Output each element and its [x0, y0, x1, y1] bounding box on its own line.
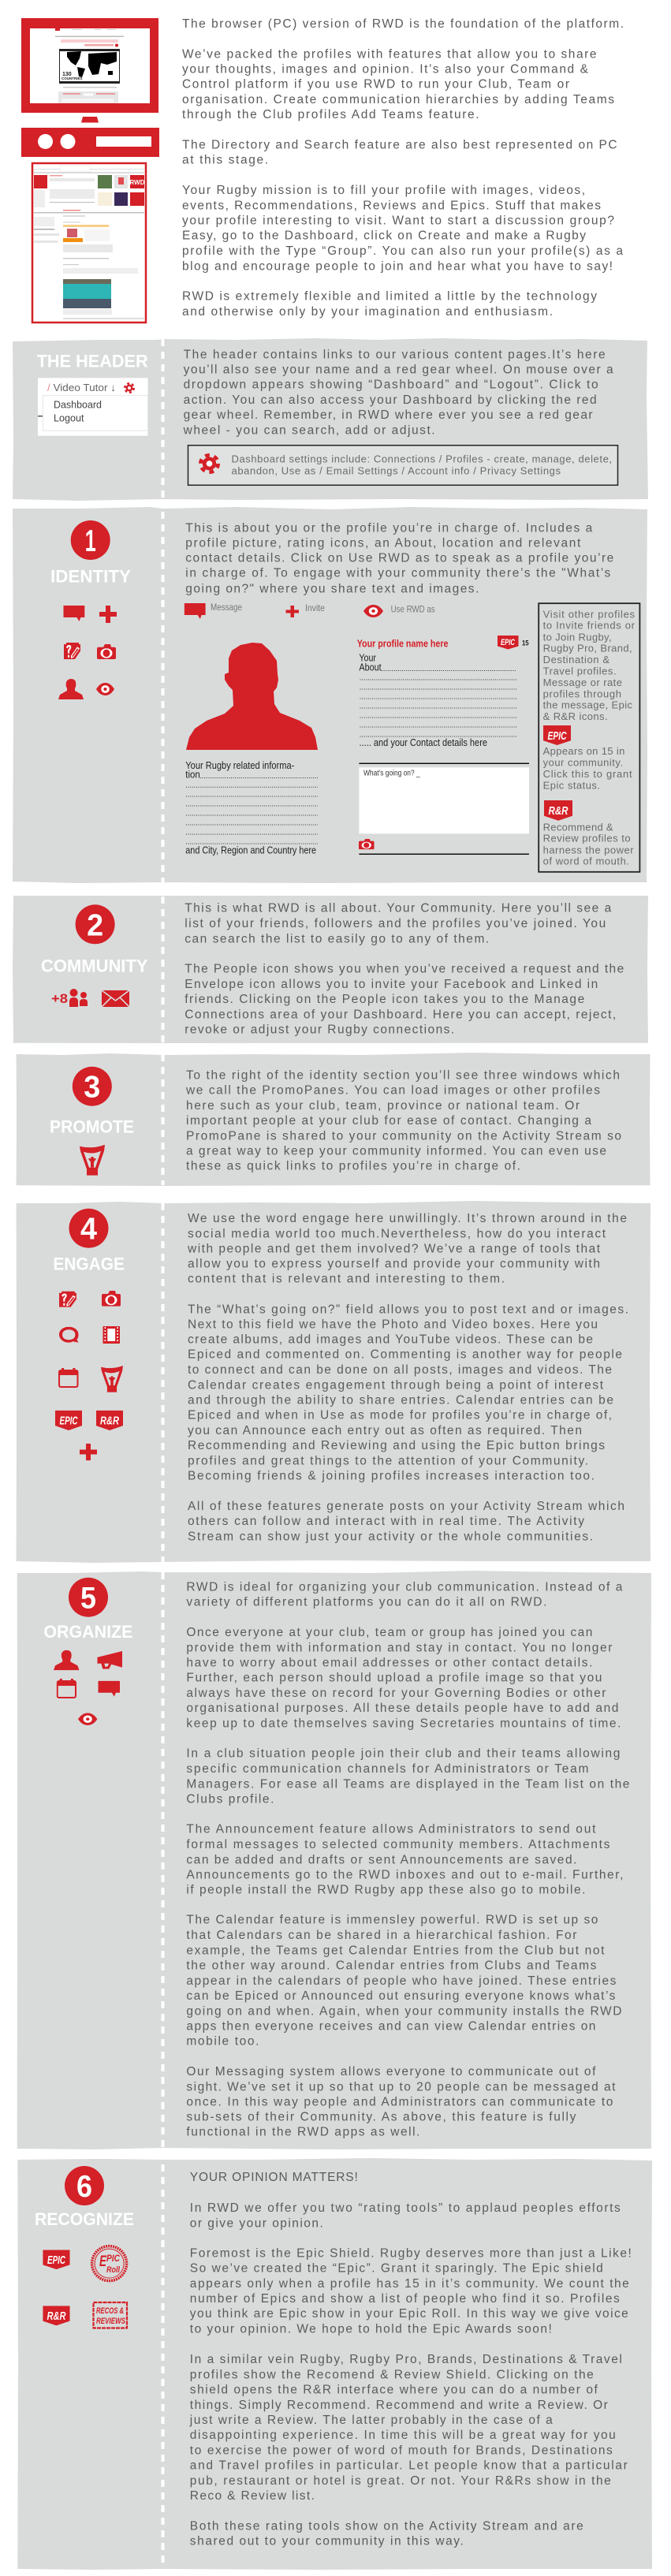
header description text	[183, 348, 613, 437]
organize description text: Announcements go to the RWD inboxes and out to e-mail. Further,	[186, 1868, 623, 1881]
recognize description text: things. Simply Recommend. Recommend and write a Review. Or	[190, 2399, 608, 2412]
profile name and about: Your profile name here	[357, 637, 448, 649]
organize description text: specific communication channels for Administrators or Team	[186, 1762, 588, 1776]
intro text block: profile with the Type “Group”. You can also run your profile(s) as a	[182, 244, 623, 258]
rugby information form lines	[185, 759, 318, 856]
intro text block: at this stage.	[182, 153, 268, 167]
monitor screen: RWD homepage screenshot: COUNTRIES	[62, 76, 83, 80]
community description text: The People icon shows you when you’ve received a request and the	[185, 963, 624, 976]
header description text: gear wheel. Remember, in RWD where ever you see a red gear	[184, 408, 593, 422]
identity description text: profile picture, rating icons, an About, location and relevant	[185, 536, 581, 550]
legend: message, invite, use RWD as: Invite	[305, 602, 325, 613]
promote description text	[185, 1068, 621, 1173]
intro text block: your thoughts, images and opinion. It’s also your Command &	[182, 63, 589, 76]
dropdown screenshot	[38, 378, 148, 436]
engage description text: social media world too much.Nevertheless, how do you interact	[188, 1227, 606, 1240]
dropdown screenshot: Dashboard	[54, 399, 102, 411]
identity icons	[58, 606, 117, 699]
organize description text: In a club situation people join their club and their teams allowing	[186, 1747, 620, 1761]
engage description text: create albums, add images and YouTube videos. These can be	[188, 1333, 593, 1347]
callout: visit other profiles: profiles through	[543, 688, 621, 699]
callout: visit other profiles: to Invite friends or	[543, 620, 636, 632]
callout: visit other profiles: R&R	[549, 804, 568, 818]
callout: visit other profiles: EPIC	[547, 729, 567, 743]
callout: visit other profiles: Rugby Pro, Brand,	[543, 643, 632, 654]
rugby information form lines: tion	[185, 769, 200, 781]
identity description text: going on?" where you share text and images.	[185, 582, 479, 595]
community description text: This is what RWD is all about. Your Community. Here you’ll see a	[185, 902, 612, 915]
intro text block: your profile interesting to visit. Want to start a discussion group?	[182, 214, 614, 228]
organize description text: have to worry about email addresses or other contact details.	[186, 1656, 592, 1669]
panel: the header	[13, 338, 648, 501]
recognize description text: or give your opinion.	[190, 2216, 323, 2230]
organize description text: sight. We’ve set it up so that up to 20 people can be messaged at	[186, 2080, 616, 2093]
number badge 4: 4	[80, 1213, 97, 1247]
organize description text: Further, each person should upload a profile image so that you	[186, 1672, 602, 1685]
icon: epic roll badge	[92, 2246, 127, 2281]
header description text: action. You can also access your Dashboard by clicking the red	[184, 393, 597, 407]
heading: community: COMMUNITY	[41, 956, 148, 976]
panel: organize	[17, 1571, 651, 2149]
callout: dashboard settings: abandon, Use as / Email Settings / Account info / Privacy Settings	[232, 465, 561, 477]
organize description text: apps then everyone receives and can view Calendar entries on	[186, 2020, 595, 2034]
intro text block: The browser (PC) version of RWD is the foundation of the platform.	[182, 17, 624, 31]
organize description text: can be Epiced or Announced out ensuring everyone knows what’s	[186, 1989, 616, 2003]
profile name and about: About	[359, 662, 382, 673]
profile picture silhouette	[186, 643, 318, 750]
organize description text: Clubs profile.	[186, 1792, 274, 1806]
callout: visit other profiles: Visit other profiles	[543, 608, 636, 620]
icon: R&R shield: R&R	[47, 2309, 66, 2323]
profile name and about	[357, 636, 529, 748]
header description text: The header contains links to our various content pages.It’s here	[184, 348, 606, 361]
icon: people requests	[51, 989, 88, 1007]
panel: recognize	[17, 2158, 652, 2570]
engage description text: content that is relevant and interesting to them.	[188, 1273, 505, 1286]
intro text block: blog and encourage people to join and hear what you have to say!	[182, 259, 613, 273]
panel: promote	[17, 1053, 650, 1186]
callout: dashboard settings	[188, 445, 618, 485]
profile name and about: ..... and your Contact details here	[360, 736, 487, 748]
organize icons	[54, 1650, 122, 1725]
rugby information form lines: Your Rugby related informa-	[185, 759, 294, 771]
identity description text	[185, 521, 613, 595]
number badge 6	[65, 2166, 104, 2205]
heading: identity: IDENTITY	[50, 566, 131, 586]
icon: people requests: +8	[51, 991, 68, 1006]
header description text: wheel - you can search, add or adjust.	[183, 423, 435, 437]
organize description text: going on and when. Again, when your community installs the RWD	[186, 2004, 621, 2018]
organize description text: RWD is ideal for organizing your club communication. Instead of a	[186, 1580, 623, 1594]
recognize description text: shield opens the R&R interface where you can do a number of	[190, 2384, 598, 2397]
organize description text: once. In this way people and Administrators can communicate to	[186, 2096, 613, 2109]
organize description text: keep up to date themselves saving Secretaries mountains of time.	[186, 1717, 621, 1730]
intro text block: Easy, go to the Dashboard, click on Create and make a Rugby	[182, 229, 586, 243]
organize description text: if people install the RWD Rugby app these also go to mobile.	[186, 1884, 585, 1897]
number badge 4	[69, 1209, 109, 1248]
engage description text: with people and get them involved? We’ve a range of tools that	[187, 1242, 601, 1255]
intro text block: through the Club profiles Add Teams feature.	[182, 108, 479, 121]
engage description text: Recommending and Reviewing and using the Epic button brings	[188, 1439, 605, 1452]
profile name and about: 15	[522, 639, 529, 648]
heading: engage: ENGAGE	[53, 1254, 125, 1274]
icon: promo banner	[80, 1145, 105, 1176]
callout: dashboard settings: Dashboard settings include: Connections / Profiles - create, manage, delete,	[232, 453, 612, 465]
panel: engage	[17, 1201, 650, 1563]
engage icons: R&R	[100, 1415, 119, 1427]
intro text block: The Directory and Search feature are also best represented on PC	[182, 138, 617, 151]
community description text: revoke or adjust your Rugby connections.	[185, 1023, 454, 1037]
promote description text: To the right of the identity section you’ll see three windows which	[186, 1068, 620, 1082]
promote description text: PromoPane is shared to your community on the Activity Stream so	[186, 1129, 621, 1143]
engage description text: We use the word engage here unwillingly. It’s thrown around in the	[188, 1212, 627, 1225]
dropdown screenshot: Logout	[54, 412, 84, 423]
organize description text: sub-sets of their Community. As above, this feature is fully	[186, 2111, 576, 2124]
organize description text: Our Messaging system allows everyone to communicate out of	[186, 2065, 596, 2078]
rugby information form lines: and City, Region and Country here	[185, 844, 316, 856]
identity description text: in charge of. To engage with your community there’s the "What’s	[185, 567, 611, 580]
recognize description text: Reco & Review list.	[190, 2489, 315, 2503]
community description text: friends. Clicking on the People icon takes you to the Manage	[185, 993, 584, 1006]
community description text: Envelope icon allows you to invite your Facebook and Linked in	[185, 978, 598, 991]
engage description text: Calendar creates engagement through being a point of interest	[188, 1378, 604, 1392]
icon: epic roll badge: Roll	[106, 2265, 121, 2275]
community description text: Connections area of your Dashboard. Here you can accept, reject,	[185, 1008, 616, 1021]
heading: promote: PROMOTE	[50, 1117, 134, 1137]
profile page screenshot: RWD	[130, 179, 145, 186]
monitor screen: RWD homepage screenshot	[55, 28, 124, 103]
engage description text: to connect and can be done on all posts, images and videos. The	[188, 1363, 612, 1377]
recognize description text: pub, restaurant or hotel is great. Or not. Your R&Rs show in the	[190, 2474, 611, 2488]
intro text block: Your Rugby mission is to fill your profile with images, videos,	[182, 184, 585, 197]
number badge 1: 1	[85, 524, 96, 558]
heading: recognize: RECOGNIZE	[35, 2209, 134, 2229]
header description text: you’ll also see your name and a red gear wheel. On mouse over a	[184, 363, 613, 376]
organize description text: variety of different platforms you can do it all on RWD.	[186, 1596, 546, 1609]
callout: visit other profiles: Recommend &	[543, 821, 613, 833]
panel: community	[13, 896, 648, 1043]
organize description text: can be added and drafts or sent Announcements are saved.	[186, 1853, 576, 1866]
engage description text: Epiced and when in Use as mode for profiles you’re in charge of,	[188, 1409, 612, 1422]
callout: visit other profiles: Message or rate	[543, 677, 622, 688]
callout: visit other profiles: Destination &	[543, 654, 609, 665]
engage description text: Becoming friends & joining profiles increases interaction too.	[188, 1470, 595, 1483]
organize description text: functional in the RWD apps as well.	[186, 2126, 419, 2139]
community description text: list of your friends, followers and the profiles you’ve joined. You	[185, 917, 606, 930]
monitor illustration	[21, 18, 158, 123]
profile page screenshot	[32, 163, 146, 322]
callout: visit other profiles: Epic status.	[543, 779, 600, 791]
heading: organize: ORGANIZE	[43, 1622, 132, 1642]
recognize description text: just write a Review. The latter probably in the case of a	[189, 2414, 553, 2427]
number badge 1	[71, 520, 110, 560]
organize description text: the other way around. Calendar entries from Clubs and Teams	[186, 1959, 597, 1973]
recognize description text: Both these rating tools show on the Activity Stream and are	[190, 2519, 583, 2533]
organize description text: The Announcement feature allows Administrators to send out	[186, 1823, 596, 1836]
recognize description text: appears only when a profile has 15 in it’s community. We count the	[190, 2277, 629, 2291]
intro text block	[182, 17, 624, 319]
header description text: dropdown appears showing “Dashboard” and “Logout”. Click to	[184, 378, 598, 392]
organize description text: Once everyone at your club, team or group has joined you can	[186, 1626, 592, 1639]
monitor frame	[21, 18, 158, 113]
organize description text	[186, 1580, 629, 2139]
callout: visit other profiles: Travel profiles.	[543, 665, 617, 677]
intro text block: We’ve packed the profiles with features that allow you to share	[182, 47, 596, 61]
organize description text: provide them with information and stay in contact. You no longer	[186, 1641, 612, 1654]
organize description text: formal messages to selected community members. Attachments	[186, 1838, 610, 1851]
number badge 6: 6	[76, 2170, 92, 2204]
icon: recos and reviews stamp	[93, 2302, 127, 2328]
promote description text: we call the PromoPanes. You can load images or other profiles	[185, 1084, 600, 1098]
intro text block: Control platform if you use RWD to run your Club, Team or	[182, 78, 569, 91]
icon: R&R shield	[43, 2306, 70, 2325]
engage description text: and through the ability to share entries. Calendar entries can be	[188, 1393, 613, 1407]
recognize description text: In RWD we offer you two “rating tools” to applaud peoples efforts	[190, 2201, 621, 2215]
promote description text: important people at your club for ease of contact. Changing a	[186, 1114, 591, 1128]
dropdown screenshot: / Video Tutor ↓	[47, 382, 116, 393]
what's going on box: What’s going on? _	[363, 769, 420, 777]
organize description text: example, the Teams get Calendar Entries from the Club but not	[186, 1944, 605, 1957]
recognize description text: and Travel profiles in particular. Let people know that a particular	[190, 2459, 628, 2473]
profile name and about: EPIC	[501, 638, 516, 647]
identity description text: This is about you or the profile you’re in charge of. Includes a	[185, 521, 593, 535]
callout: visit other profiles: your community.	[543, 757, 623, 769]
what's going on box	[359, 763, 529, 854]
icon: recos and reviews stamp: REVIEWS	[96, 2317, 125, 2326]
promote description text: these as quick links to profiles you’re in charge of.	[186, 1160, 520, 1173]
intro text block: RWD is extremely flexible and limited a little by the technology	[182, 290, 597, 304]
intro text block: events, Recommendations, Reviews and Epics. Stuff that makes	[182, 199, 601, 212]
recognize description text: to your opinion. We hope to hold the Epic Awards soon!	[190, 2323, 552, 2336]
profile name and about: Your	[359, 652, 377, 664]
icon: epic roll badge: PIC	[106, 2253, 120, 2264]
legend: message, invite, use RWD as	[185, 602, 435, 619]
engage description text: others can follow and interact with in real time. The Activity	[188, 1515, 584, 1528]
monitor base bar icon	[21, 128, 159, 157]
panel: identity	[13, 507, 647, 883]
recognize description text: YOUR OPINION MATTERS!	[190, 2171, 358, 2184]
recognize description text: profiles show the Recomend & Review Shield. Clicking on the	[190, 2368, 594, 2381]
number badge 2: 2	[87, 908, 103, 942]
recognize description text: Foremost is the Epic Shield. Rugby deserves more than just a Like!	[190, 2246, 632, 2260]
organize description text: mobile too.	[186, 2035, 259, 2048]
number badge 5	[69, 1578, 108, 1617]
recognize description text: number of Epics and show a list of people who find it so. Profiles	[190, 2292, 620, 2306]
engage description text: you can Announce each entry out as often as required. Then	[188, 1424, 582, 1437]
intro text block: organisation. Create communication hierarchies by adding Teams	[182, 93, 614, 106]
legend: message, invite, use RWD as: Use RWD as	[391, 604, 435, 615]
engage description text	[187, 1212, 628, 1543]
number badge 3: 3	[84, 1071, 100, 1105]
intro text block: and otherwise only by your imagination and enthusiasm.	[182, 305, 553, 319]
recognize description text: you think are Epic show in your Epic Roll. In this way we give voice	[190, 2307, 628, 2321]
organize description text: organisational purposes. All these details people have to add and	[186, 1702, 618, 1715]
recognize description text: shared out to your community in this way.	[190, 2535, 464, 2548]
community description text: can search the list to easily go to any of them.	[185, 932, 489, 945]
identity description text: contact details. Click on Use RWD as to speak as a profile you’re	[185, 552, 613, 565]
recognize description text: to exercise the power of word of mouth for Brands, Destinations	[190, 2444, 613, 2457]
engage description text: Next to this field we have the Photo and Video boxes. Here you	[188, 1318, 598, 1331]
icon: epic shield: EPIC	[47, 2254, 66, 2267]
number badge 2	[76, 904, 115, 944]
heading: the header: THE HEADER	[37, 352, 148, 371]
engage description text: Epiced and commented on. Commenting is another way for people	[188, 1348, 622, 1362]
icon: envelope	[102, 990, 129, 1007]
engage icons: EPIC	[60, 1415, 78, 1427]
callout: visit other profiles	[539, 603, 639, 872]
promote description text: a great way to keep your community informed. You can even use	[186, 1144, 606, 1158]
callout: visit other profiles: the message, Epic	[543, 699, 632, 711]
legend: message, invite, use RWD as: Message	[211, 602, 242, 613]
callout: visit other profiles: Click this to grant	[543, 768, 632, 780]
community description text	[185, 902, 624, 1037]
engage description text: The “What’s going on?” field allows you to post text and or images.	[188, 1303, 628, 1316]
monitor stand	[81, 117, 99, 123]
promote description text: here such as your club, team, province or national team. Or	[186, 1099, 580, 1113]
callout: visit other profiles: of word of mouth.	[543, 856, 629, 867]
icon: epic roll badge: E	[99, 2254, 107, 2270]
recognize description text: So we’ve created the “Epic”. Grant it sparingly. The Epic shield	[190, 2262, 603, 2276]
icon: epic shield	[43, 2250, 70, 2269]
number badge 5: 5	[80, 1582, 96, 1616]
engage description text: allow you to express yourself and provide your community with	[188, 1258, 600, 1271]
recognize description text: In a similar vein Rugby, Rugby Pro, Brands, Destinations & Travel	[190, 2353, 622, 2366]
engage description text: Stream can show just your activity or the whole communities.	[188, 1530, 593, 1543]
callout: visit other profiles: & R&R icons.	[543, 710, 608, 722]
callout: visit other profiles: to Join Rugby,	[543, 631, 612, 643]
organize description text: The Calendar feature is immensley powerful. RWD is set up so	[186, 1914, 598, 1927]
engage description text: profiles and great things to the attention of your Community.	[188, 1454, 588, 1467]
monitor screen: RWD homepage screenshot: 130	[62, 72, 72, 77]
organize description text: Managers. For ease all Teams are displayed in the Team list on the	[186, 1777, 629, 1791]
callout: visit other profiles: harness the power	[543, 844, 634, 856]
callout: visit other profiles: Appears on 15 in	[543, 745, 624, 757]
number badge 3	[73, 1067, 112, 1106]
organize description text: always have these on record for your Governing Bodies or other	[186, 1687, 606, 1700]
engage description text: All of these features generate posts on your Activity Stream which	[188, 1500, 624, 1513]
recognize description text: disappointing experience. In time this will be a great way for you	[190, 2429, 616, 2442]
callout: visit other profiles: Review profiles to	[543, 833, 631, 844]
recognize description text	[189, 2171, 632, 2548]
organize description text: appear in the calendars of people who have joined. These entries	[186, 1974, 617, 1988]
organize description text: that Calendars can be shared in a hierarchical fashion. For	[186, 1929, 576, 1942]
icon: recos and reviews stamp: RECOS &	[96, 2306, 124, 2316]
engage icons	[55, 1291, 123, 1460]
